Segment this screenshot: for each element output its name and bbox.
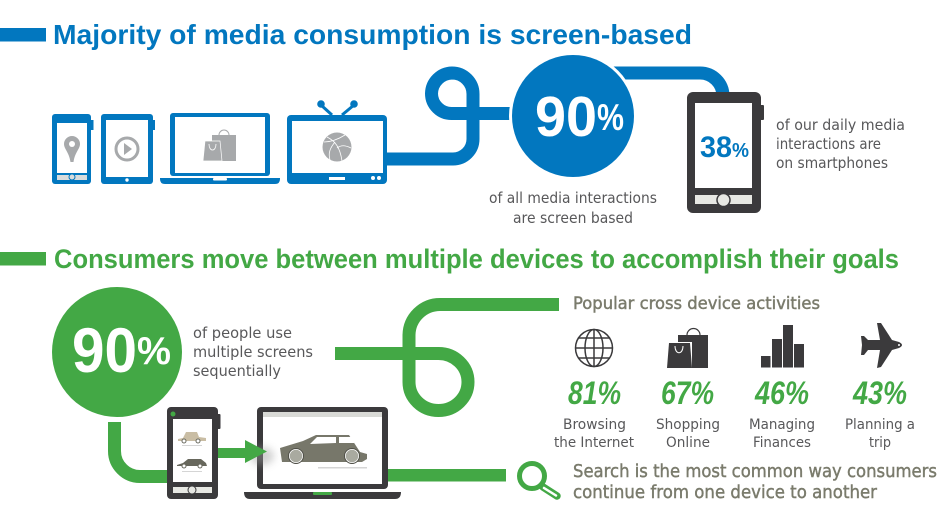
activity: managing finances: Managing <box>749 417 815 433</box>
section: screen-based media <box>0 19 910 227</box>
icon: airplane <box>861 323 902 368</box>
section: multiple devices <box>0 244 943 503</box>
icon: TV with basketball <box>287 100 387 184</box>
stat circle: 90%: 90 <box>72 316 137 386</box>
activity: managing finances <box>749 325 815 451</box>
caption: daily smartphone interactions: of our daily media <box>776 116 905 134</box>
stat circle: 90% <box>509 52 637 180</box>
icon: magnifying glass <box>520 464 557 496</box>
arrow: phone to laptop <box>218 440 274 465</box>
activity: shopping online <box>656 328 720 451</box>
caption: daily smartphone interactions: interactions are <box>776 135 881 153</box>
icon: bar chart <box>761 325 804 368</box>
activity: shopping online: 67% <box>661 375 714 411</box>
activity: managing finances: 46% <box>754 375 809 411</box>
activity: planning a trip: Planning a <box>845 417 915 433</box>
callout: search text: continue from one device to another <box>573 482 878 503</box>
icon: large smartphone with 38%: % <box>732 140 749 162</box>
accent bar: green <box>0 252 46 266</box>
stat circle: 90%: % <box>597 97 624 138</box>
activity: browsing the internet: 81% <box>568 375 621 411</box>
icon: shopping bags <box>667 328 708 368</box>
connector: green line from circle to phone <box>114 422 172 476</box>
stat circle: 90%: % <box>137 330 171 373</box>
icon: large smartphone with 38% <box>687 92 764 213</box>
icon: globe <box>576 330 612 366</box>
caption: multiple screens: sequentially <box>193 362 281 380</box>
icon: large smartphone with 38%: 38 <box>700 131 732 164</box>
activity: planning a trip: 43% <box>852 375 907 411</box>
stat circle: 90% <box>52 287 182 417</box>
connector: blue loop from TV to circle <box>385 73 510 159</box>
connector: green loop to activities <box>335 304 559 410</box>
icon: laptop with shopping bags <box>160 113 280 184</box>
icon: phone with cars <box>167 407 220 499</box>
caption: multiple screens: multiple screens <box>193 343 313 361</box>
activity: shopping online: Shopping <box>656 417 720 433</box>
connector: blue line from circle to phone <box>610 73 723 96</box>
icon: laptop with car <box>244 407 401 499</box>
title: majority of media consumption: Majority of media consumption is screen-based <box>53 19 692 50</box>
activity: browsing the internet <box>554 330 634 451</box>
heading: popular activities: Popular cross device activities <box>573 294 820 313</box>
activity: shopping online: Online <box>666 435 710 451</box>
stat circle: 90%: 90 <box>535 85 597 149</box>
activity: managing finances: Finances <box>753 435 811 451</box>
caption: multiple screens: of people use <box>193 324 292 342</box>
activity: planning a trip: trip <box>869 435 891 451</box>
activity: browsing the internet: Browsing <box>563 417 626 433</box>
caption: all media interactions: of all media interactions <box>489 189 657 207</box>
accent bar: blue <box>0 28 46 42</box>
connector: green line from laptop to search <box>385 469 506 482</box>
title: consumers move between devices: Consumers move between multiple devices to accomplish their goals <box>54 244 899 274</box>
icon: smartphone with map pin <box>52 114 94 184</box>
activity: planning a trip <box>845 323 915 451</box>
caption: daily smartphone interactions: on smartphones <box>776 154 888 172</box>
caption: all media interactions: are screen based <box>513 209 633 227</box>
icon: tablet with play button <box>101 114 155 184</box>
activity: browsing the internet: the Internet <box>554 435 634 451</box>
